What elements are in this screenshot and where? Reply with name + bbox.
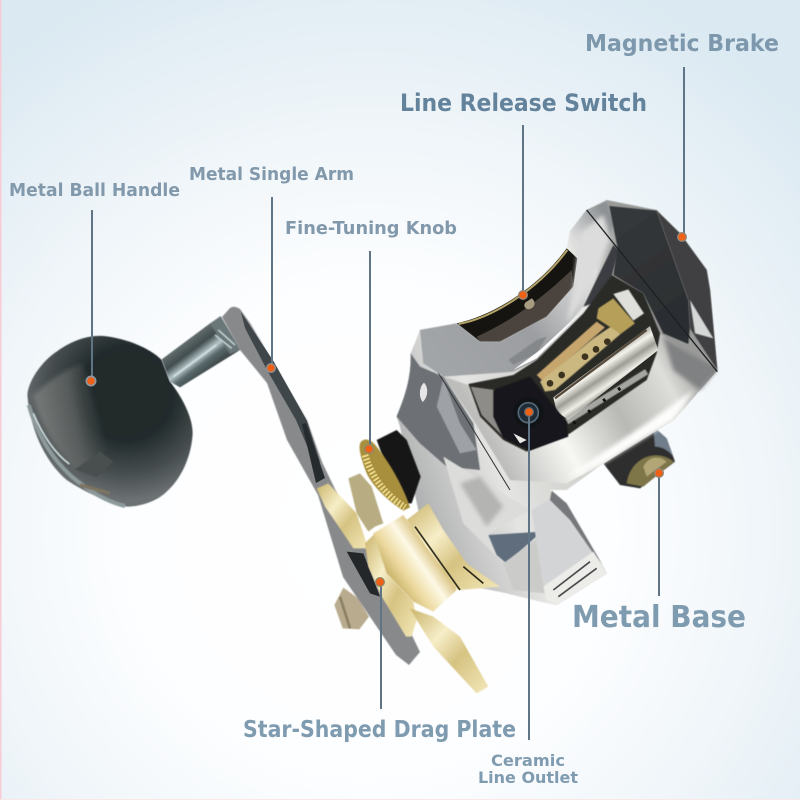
dark side panel <box>587 206 717 372</box>
leader: star-shaped drag plate <box>375 577 385 709</box>
reel window <box>468 275 660 452</box>
label: Metal Ball Handle: Metal Ball Handle <box>9 181 180 201</box>
brass upper bar <box>537 322 605 382</box>
leader: fine-tuning knob <box>364 251 374 454</box>
brass end and silver end <box>597 298 635 334</box>
lower frame band <box>443 333 717 483</box>
label: Metal Single Arm: Metal Single Arm <box>189 165 354 185</box>
hub <box>373 515 457 612</box>
leader: magnetic brake <box>677 67 687 242</box>
star-shaped drag plate <box>317 473 500 693</box>
bolt <box>334 588 369 629</box>
label: Metal Base: Metal Base <box>572 600 746 635</box>
reel body <box>397 200 717 605</box>
hinge <box>543 552 607 605</box>
line guide block <box>493 377 568 451</box>
label: Ceramic Line Outlet: Line Outlet <box>478 768 578 787</box>
lower blade <box>410 608 488 693</box>
label: Star-Shaped Drag Plate: Star-Shaped Drag Plate <box>243 717 516 743</box>
teeth <box>567 372 647 422</box>
spool holes <box>547 338 611 387</box>
leader: ceramic line outlet <box>524 407 534 740</box>
label: Line Release Switch: Line Release Switch <box>400 89 647 117</box>
dark gap behind plate <box>347 552 380 597</box>
gold ring plate <box>365 533 417 637</box>
magnetic brake cap <box>657 211 717 370</box>
back blade <box>348 473 383 532</box>
base bracket <box>532 498 592 587</box>
silver side and base details <box>443 457 607 605</box>
label: Magnetic Brake: Magnetic Brake <box>585 31 779 57</box>
silver spool <box>553 326 658 420</box>
line release switch window <box>457 248 577 342</box>
fine-tuning knob <box>360 430 421 511</box>
side badge <box>420 383 427 402</box>
leader: metal single arm <box>266 197 276 373</box>
label: Fine-Tuning Knob: Fine-Tuning Knob <box>285 219 457 239</box>
top thumb bar <box>420 202 618 377</box>
label: Ceramic Line Outlet: Ceramic <box>491 751 565 770</box>
metal ball handle <box>27 336 193 507</box>
leader lines and dots <box>86 67 687 740</box>
arm channel <box>241 312 320 462</box>
brass spool band <box>540 325 621 392</box>
handle stem <box>162 316 241 387</box>
reel illustration <box>27 200 717 693</box>
label: Ceramic Line Outlet <box>478 751 578 787</box>
leader: metal base <box>654 468 664 596</box>
collar <box>407 503 500 590</box>
leader: metal ball handle <box>86 210 96 386</box>
dark strip on bar <box>583 245 618 307</box>
arm slot <box>302 423 325 483</box>
metal single arm <box>222 307 420 665</box>
silver frame silhouette <box>397 200 717 605</box>
grey left side <box>397 353 480 470</box>
leader: line release switch <box>518 125 528 300</box>
front blade <box>317 483 368 548</box>
metal base foot <box>603 427 675 488</box>
